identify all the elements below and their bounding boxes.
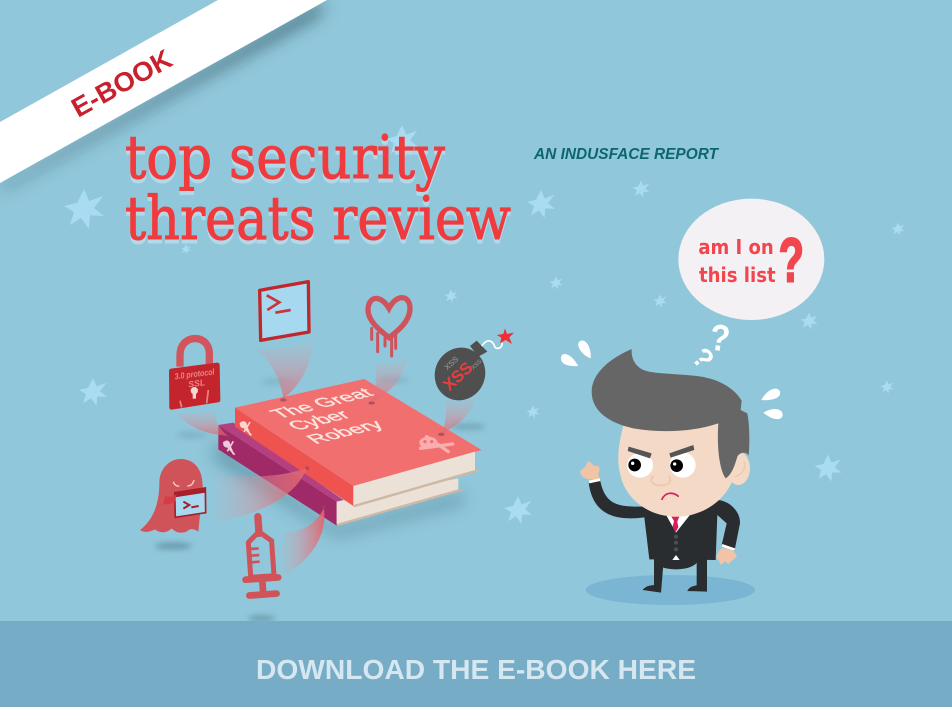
character: confused man	[561, 199, 824, 605]
book shadow	[215, 440, 463, 537]
book title: The Great	[266, 386, 380, 422]
speech bubble: this list	[699, 263, 776, 287]
mouth	[662, 493, 679, 500]
nose	[651, 476, 670, 485]
face	[618, 423, 737, 517]
title: top security	[125, 123, 445, 193]
connector dots	[224, 398, 445, 509]
small question marks: ?	[707, 315, 733, 360]
lower book	[218, 423, 464, 526]
small question marks	[686, 315, 733, 375]
icon: xss bomb: XSS	[471, 359, 483, 371]
icon: xss bomb: XSS	[439, 358, 476, 395]
beams	[177, 341, 476, 578]
raised hand	[580, 462, 600, 479]
sweat drops	[561, 340, 783, 419]
ear detail	[735, 462, 745, 477]
ribbon: e-book	[0, 0, 327, 194]
book title	[266, 386, 389, 447]
icon: ssl lock: 3.0 protocol	[174, 366, 215, 381]
title: threats review	[125, 188, 511, 258]
speech bubble: am I on	[698, 235, 774, 259]
subtitle: AN INDUSFACE REPORT	[533, 146, 719, 163]
icon: heartbleed	[368, 298, 410, 356]
shirt and tie	[667, 514, 691, 560]
book title: Robery	[302, 418, 389, 447]
speech bubble	[678, 199, 824, 320]
icon: terminal	[260, 282, 309, 340]
download bar	[0, 621, 952, 707]
icon: ghost	[140, 459, 206, 533]
ear	[727, 452, 750, 485]
skull emblem	[419, 437, 453, 452]
illustration: books and threats	[140, 282, 514, 621]
speech bubble: ?	[779, 227, 804, 296]
spine emblem	[240, 421, 251, 435]
eyes	[627, 445, 696, 478]
call to action: DOWNLOAD THE E-BOOK HERE	[256, 654, 696, 685]
icon: syringe	[241, 516, 279, 596]
title	[125, 123, 511, 258]
title: top security	[125, 127, 445, 197]
cuffs	[589, 478, 735, 551]
legs and shoes	[643, 551, 707, 593]
icon: xss bomb	[426, 328, 514, 409]
title: threats review	[125, 184, 511, 254]
suit	[589, 479, 740, 560]
upper book	[235, 379, 482, 507]
ground shadow	[586, 575, 755, 605]
background stars	[64, 125, 904, 524]
icon: ssl lock: SSL	[188, 377, 206, 389]
small question marks: ?	[686, 341, 720, 375]
icon: xss bomb: XSS	[443, 354, 461, 372]
spine emblem	[223, 441, 235, 455]
icon: ssl lock	[171, 339, 218, 407]
hair	[592, 349, 749, 478]
lower hand	[717, 548, 737, 565]
icon shadows	[155, 377, 485, 621]
book title: Cyber	[284, 408, 356, 434]
ribbon label: E-BOOK	[66, 43, 178, 123]
